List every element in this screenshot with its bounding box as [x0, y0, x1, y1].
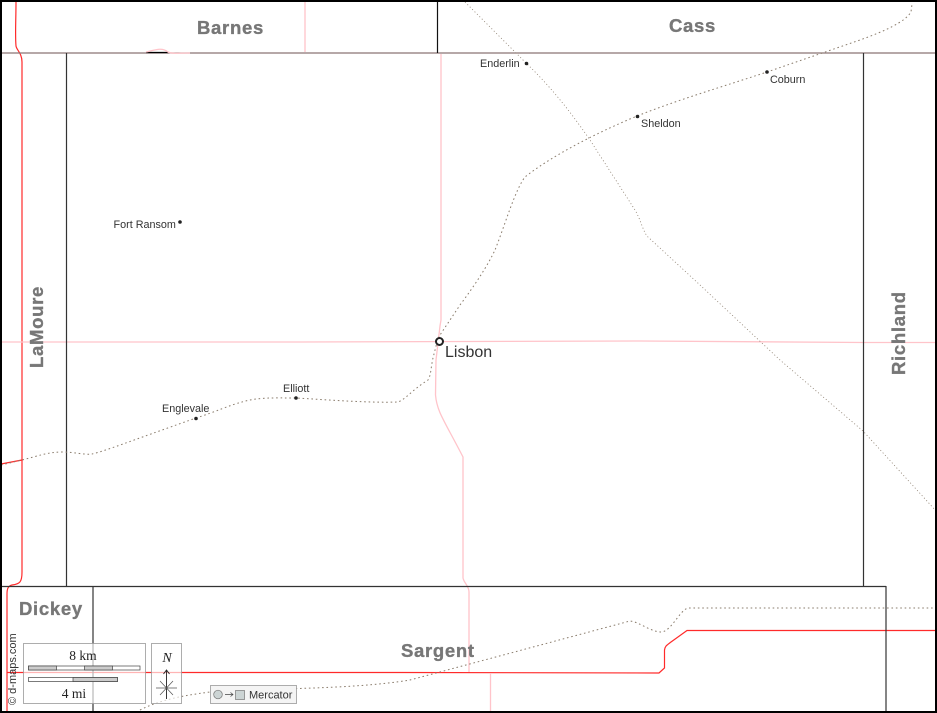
county seat: Lisbon: Lisbon: [445, 344, 492, 361]
town: Sheldon: [636, 115, 681, 130]
county seat: Lisbon: [436, 338, 492, 361]
town: Coburn: [765, 70, 805, 86]
town: Sheldon: Sheldon: [641, 118, 681, 130]
town: Englevale: Englevale: [162, 403, 209, 415]
scale bar: 4 mi: [62, 686, 86, 701]
projection legend: Mercator: Mercator: [249, 690, 293, 702]
highway bump over county line: [146, 49, 190, 53]
county label: Dickey: Dickey: [19, 598, 83, 619]
scale bar: [24, 644, 146, 704]
town: Coburn: Coburn: [770, 74, 805, 86]
county label: Sargent: Sargent: [401, 640, 475, 661]
county label: Richland: Richland: [888, 291, 909, 375]
town: Enderlin: Enderlin: [480, 58, 520, 70]
credit: d-maps.com: © d-maps.com: [7, 633, 19, 705]
county label: Barnes: Barnes: [197, 17, 264, 38]
county label: Cass: Cass: [669, 15, 716, 36]
scale bar: 8 km: [69, 648, 97, 663]
north compass: [152, 644, 182, 704]
town: Fort Ransom: Fort Ransom: [114, 219, 176, 231]
county label: LaMoure: LaMoure: [26, 286, 47, 368]
projection legend: Mercator: [210, 686, 296, 704]
north compass: N: [161, 651, 172, 666]
town: Englevale: [162, 403, 209, 420]
town: Elliott: Elliott: [283, 383, 309, 395]
